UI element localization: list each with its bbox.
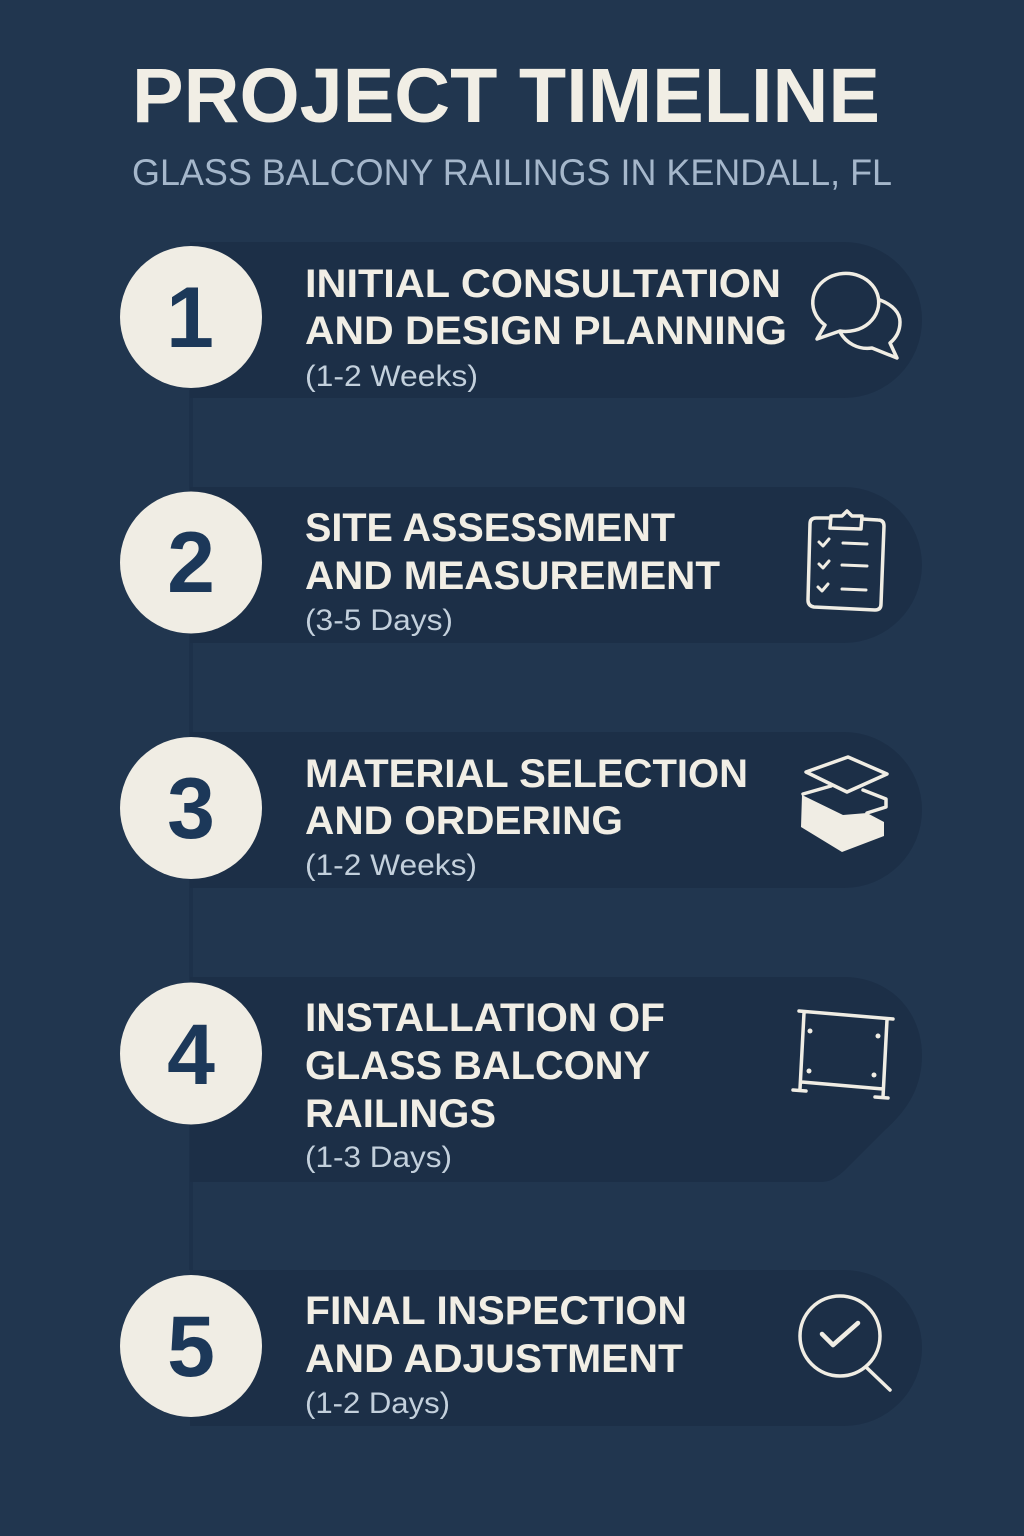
step 4 panel xyxy=(120,977,922,1182)
step 5 duration: (1-2 Days) xyxy=(305,1387,450,1420)
number badge 2: 2 xyxy=(167,515,215,611)
panel background xyxy=(190,487,922,643)
step 3 heading: MATERIAL SELECTION xyxy=(305,752,748,796)
step 2 duration: (3-5 Days) xyxy=(305,604,453,637)
subtitle: GLASS BALCONY RAILINGS IN KENDALL, FL xyxy=(132,152,892,193)
panel background xyxy=(190,242,922,398)
number badge 3 xyxy=(120,737,262,879)
icon: magnifier with check xyxy=(800,1296,890,1390)
step 5 heading: AND ADJUSTMENT xyxy=(305,1337,683,1381)
step 2 heading: AND MEASUREMENT xyxy=(305,554,720,598)
icon: glass railing panel xyxy=(793,1011,893,1098)
step 4 duration: (1-3 Days) xyxy=(305,1141,452,1174)
step 2 panel xyxy=(120,487,922,643)
panel background xyxy=(190,732,922,888)
number badge 3: 3 xyxy=(167,761,215,857)
step 1 heading xyxy=(305,262,787,353)
icon: stacked material layers xyxy=(801,757,887,852)
step 1 duration: (1-2 Weeks) xyxy=(305,360,478,393)
step 4 heading: RAILINGS xyxy=(305,1092,496,1136)
step 3 panel xyxy=(120,732,922,888)
number badge 2 xyxy=(120,492,262,634)
number badge 1: 1 xyxy=(166,270,214,366)
step 1 panel xyxy=(120,242,922,398)
step 4 heading: GLASS BALCONY xyxy=(305,1044,650,1088)
icon: clipboard checklist xyxy=(808,511,884,610)
number badge 1 xyxy=(120,246,262,388)
step 3 heading: AND ORDERING xyxy=(305,799,623,843)
number badge 4: 4 xyxy=(167,1007,215,1103)
panel background xyxy=(190,1270,922,1426)
step 5 panel xyxy=(120,1270,922,1426)
number badge 5: 5 xyxy=(167,1299,215,1395)
step 1 heading: INITIAL CONSULTATION xyxy=(305,262,781,306)
step 2 heading xyxy=(305,506,720,598)
step 1 heading: AND DESIGN PLANNING xyxy=(305,309,787,353)
step 3 heading xyxy=(305,752,748,843)
step 4 heading xyxy=(305,996,665,1136)
icon: speech bubbles xyxy=(813,273,900,358)
number badge 5 xyxy=(120,1275,262,1417)
step 2 heading: SITE ASSESSMENT xyxy=(305,506,675,550)
panel background xyxy=(190,977,922,1182)
step 5 heading: FINAL INSPECTION xyxy=(305,1289,687,1333)
step 3 duration: (1-2 Weeks) xyxy=(305,849,477,882)
title: PROJECT TIMELINE xyxy=(132,53,880,139)
step 4 heading: INSTALLATION OF xyxy=(305,996,665,1040)
number badge 4 xyxy=(120,982,262,1124)
step 5 heading xyxy=(305,1289,687,1381)
